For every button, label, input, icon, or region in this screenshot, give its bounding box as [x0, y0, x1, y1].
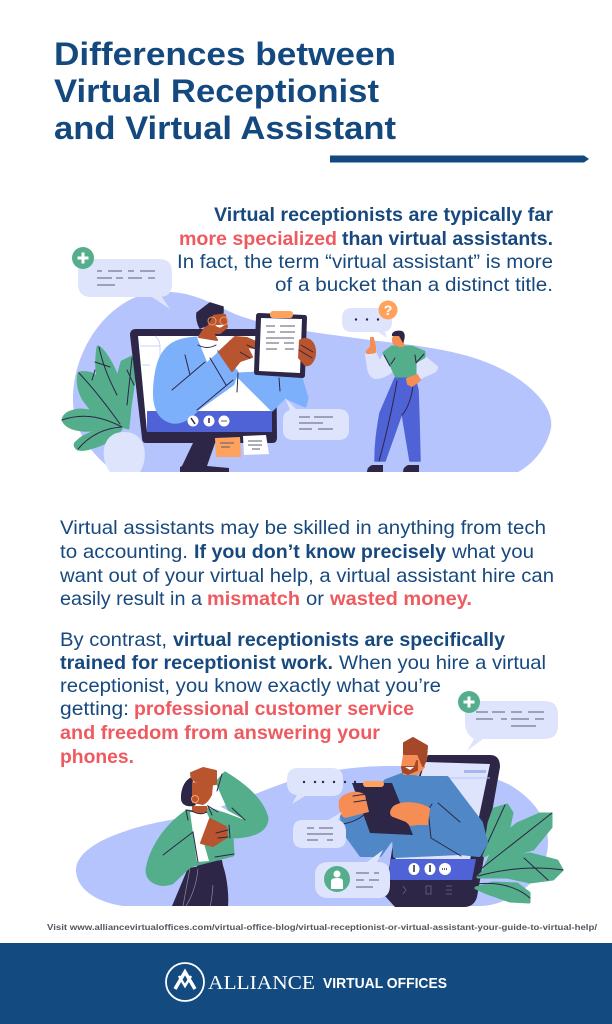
- text block: virtual assistants: mismatch: [207, 588, 300, 610]
- logo icon: [166, 963, 204, 1001]
- footer band: [0, 943, 612, 1024]
- speech bubble: question: [342, 300, 398, 338]
- title: Virtual Receptionist: [54, 73, 379, 109]
- logo descriptor: VIRTUAL OFFICES: [323, 975, 447, 992]
- text block: virtual assistants: what you: [451, 541, 534, 563]
- sticky notes: [215, 435, 269, 457]
- title accent bar: [330, 156, 589, 162]
- woman: [147, 768, 267, 906]
- text block: intro: of a bucket than a distinct title.: [275, 274, 553, 296]
- text block: virtual receptionists: and freedom from answering your: [60, 722, 380, 744]
- text block: intro: more specialized: [179, 228, 337, 250]
- text block: virtual assistants: [59, 517, 554, 610]
- plant pot: [104, 432, 145, 472]
- title: and Virtual Assistant: [54, 110, 396, 146]
- illustration: stressed woman and man in phone: [76, 691, 563, 907]
- man: [339, 738, 486, 856]
- text block: virtual receptionists: receptionist, you know exactly what you’re: [60, 675, 441, 697]
- text block: virtual assistants: If you don’t know precisely: [194, 541, 446, 563]
- text block: virtual receptionists: When you hire a virtual: [339, 652, 546, 674]
- logo wordmark: ALLIANCE: [208, 972, 315, 994]
- call controls: [188, 416, 230, 426]
- text block: virtual assistants: want out of your virtual help, a virtual assistant hire can: [59, 565, 554, 587]
- title: [54, 36, 396, 146]
- text block: virtual assistants: easily result in a: [60, 588, 202, 610]
- background blob: [73, 292, 551, 472]
- text block: virtual receptionists: trained for receptionist work.: [60, 652, 333, 674]
- speech bubble: person: [315, 850, 390, 898]
- call controls: [408, 863, 451, 875]
- source link: Visit www.alliancevirtualoffices.com/virtual-office-blog/virtual-receptionist-or-virtual-assistant-your-guide-to-virtual-help/: [47, 923, 598, 932]
- background blob: [76, 766, 548, 906]
- text block: virtual receptionists: phones.: [60, 746, 134, 768]
- text block: intro: than virtual assistants.: [342, 228, 553, 250]
- phone: [385, 755, 500, 907]
- clipboard: [254, 311, 316, 378]
- text block: intro: In fact, the term “virtual assistant” is more: [177, 251, 553, 273]
- text block: intro: [177, 204, 553, 296]
- plant: [62, 347, 134, 449]
- illustration: receptionist at monitor and man with question: [62, 247, 551, 472]
- text block: virtual receptionists: By contrast,: [60, 629, 167, 651]
- text block: virtual receptionists: getting:: [60, 698, 129, 720]
- text block: virtual receptionists: virtual receptionists are specifically: [173, 629, 505, 651]
- speech bubble: question: ?: [384, 302, 392, 318]
- text block: virtual receptionists: professional customer service: [134, 698, 414, 720]
- text block: virtual assistants: or: [306, 588, 325, 610]
- man with question: [366, 331, 437, 472]
- text block: virtual assistants: Virtual assistants may be skilled in anything from tech: [60, 517, 546, 539]
- speech bubble: lines: [293, 812, 346, 848]
- text block: virtual assistants: wasted money.: [329, 588, 472, 610]
- speech bubble: dots: [287, 768, 356, 804]
- speech bubble: lower monitor: [283, 398, 349, 440]
- text block: virtual assistants: to accounting.: [60, 541, 188, 563]
- speech bubble: plus: [458, 691, 558, 751]
- receptionist: [154, 303, 307, 422]
- speech bubble: plus: [72, 247, 172, 309]
- plant: [476, 805, 563, 902]
- text block: virtual receptionists: [60, 629, 546, 768]
- monitor: [130, 329, 277, 472]
- text block: intro: Virtual receptionists are typically far: [214, 204, 553, 226]
- title: Differences between: [54, 36, 396, 72]
